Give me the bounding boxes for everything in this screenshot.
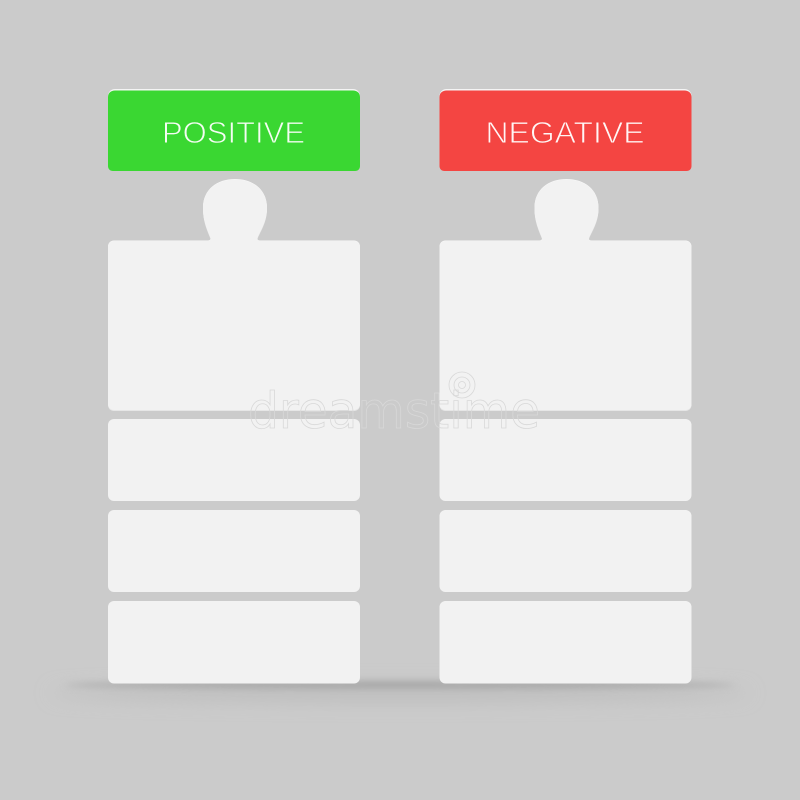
ground shadow	[50, 682, 750, 701]
card: row 3	[440, 601, 692, 684]
panel: positive	[108, 89, 360, 684]
card: row 2	[440, 510, 692, 592]
card: row 3	[108, 601, 360, 684]
heading: negative: NEGATIVE	[486, 115, 644, 150]
card: large puzzle card with tab	[440, 179, 692, 411]
watermark: dreamstime	[248, 382, 540, 440]
heading: positive	[108, 89, 360, 171]
card: large puzzle card with tab	[108, 179, 360, 411]
card: row 1	[440, 419, 692, 501]
card: row 2	[108, 510, 360, 592]
heading: negative	[440, 89, 692, 171]
panel: negative	[440, 89, 692, 684]
heading: positive: POSITIVE	[162, 115, 305, 150]
card: row 1	[108, 419, 360, 501]
